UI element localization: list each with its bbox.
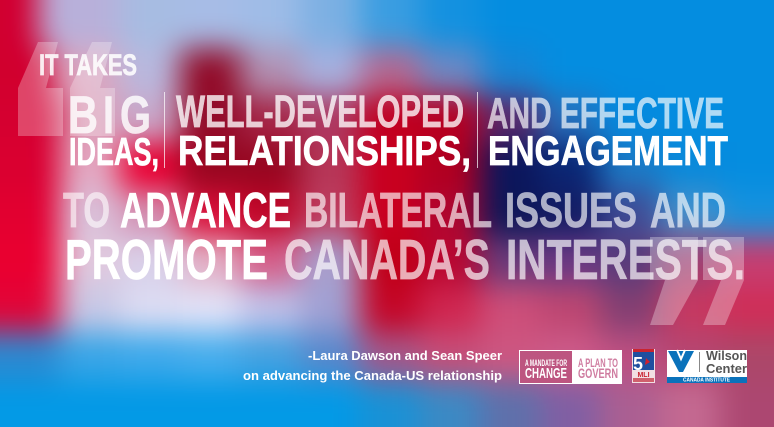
logo: a mandate for change, a plan to govern: A PLAN TO (578, 356, 618, 370)
logo: Wilson Center Canada Institute: Center (706, 362, 747, 376)
intro text: it takes: IT TAKES (39, 49, 137, 82)
column: and effective engagement (487, 89, 728, 174)
attribution: on advancing the Canada-US relationship (243, 368, 502, 383)
logo: a mandate for change, a plan to govern: A MANDATE FOR (525, 358, 567, 368)
divider: second (477, 92, 478, 168)
logo: Wilson Center Canada Institute (667, 349, 747, 384)
column: well-developed relationships: WELL-DEVELOPED (176, 86, 464, 137)
statement line two: CANADA’S (284, 228, 490, 292)
column: well-developed relationships: RELATIONSHIPS, (178, 127, 471, 174)
divider: first (164, 92, 165, 168)
statement line one: BILATERAL (304, 184, 492, 238)
logo: MLI (632, 349, 655, 383)
statement line two (65, 228, 745, 292)
column: big ideas (68, 86, 159, 174)
column: big ideas: I (103, 86, 114, 145)
column: big ideas: B (68, 86, 98, 145)
column: well-developed relationships (176, 86, 471, 174)
logo: Wilson Center Canada Institute: CANADA INSTITUTE (683, 378, 731, 384)
attribution: -Laura Dawson and Sean Speer (308, 348, 502, 363)
statement line one: AND (650, 184, 726, 238)
statement line one: ADVANCE (120, 184, 291, 238)
opening quotation mark (18, 42, 115, 136)
statement line one (63, 184, 726, 238)
statement line one: TO (63, 184, 110, 238)
column: big ideas: IDEAS, (69, 131, 159, 174)
logo: a mandate for change, a plan to govern: GOVERN (578, 365, 618, 381)
logo: a mandate for change, a plan to govern (519, 350, 622, 384)
attribution (243, 348, 502, 383)
closing quotation mark (650, 237, 744, 325)
logo: MLI: 5 (633, 354, 643, 374)
statement line one: ISSUES (505, 184, 637, 238)
column: big ideas: G (120, 86, 151, 145)
logo: MLI: MLI (637, 372, 650, 379)
statement line two: PROMOTE (65, 228, 268, 292)
logo: Wilson Center Canada Institute: Wilson (706, 349, 747, 363)
logo: a mandate for change, a plan to govern: CHANGE (525, 365, 567, 382)
